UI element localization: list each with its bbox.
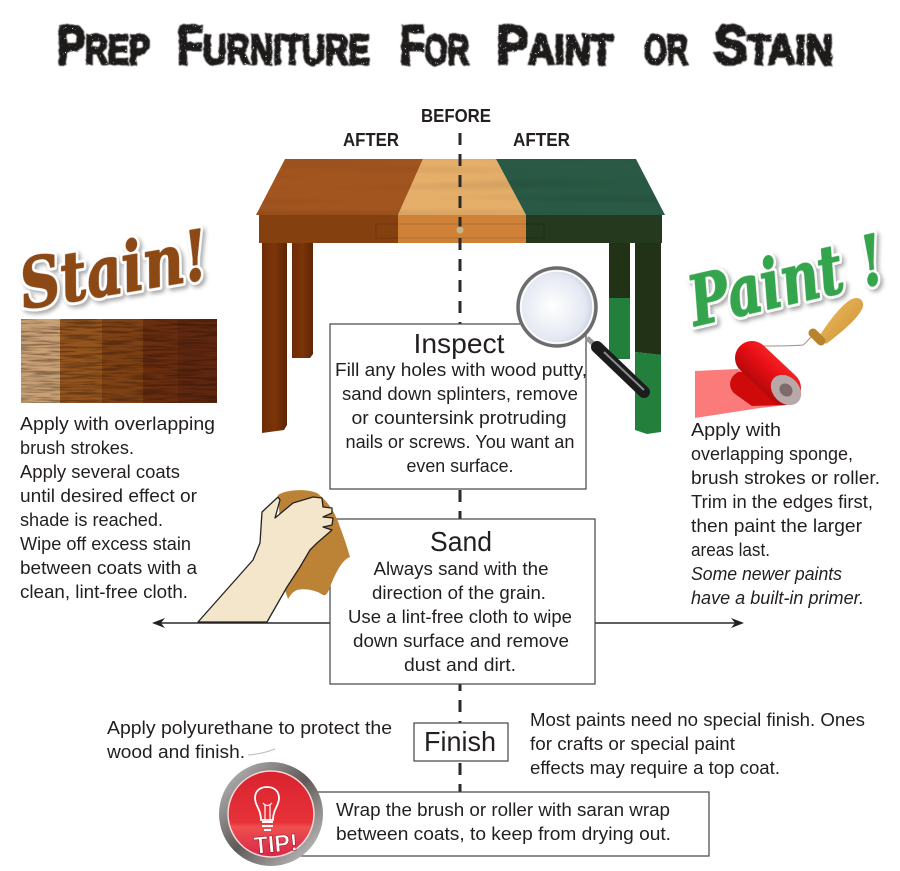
stain instructions: shade is reached. (20, 509, 163, 530)
bare apron (398, 215, 526, 243)
painted tabletop (496, 159, 665, 215)
stain instructions: Apply several coats (20, 461, 180, 482)
stain instructions (20, 413, 215, 602)
after label right: AFTER (513, 130, 570, 150)
icon: hand with cloth (198, 490, 350, 622)
title: FURNITURE (177, 13, 370, 76)
icon: tip badge: TIP! (253, 829, 299, 860)
title: PAINT (496, 13, 613, 76)
stain heading: Stain! (14, 216, 214, 326)
stain instructions: Wipe off excess stain (20, 533, 191, 554)
paint finish note: for crafts or special paint (530, 733, 735, 754)
stained apron (259, 215, 398, 243)
sand text: dust and dirt. (404, 654, 516, 675)
stain instructions: brush strokes. (20, 437, 134, 458)
title (57, 13, 833, 76)
after label left: AFTER (343, 130, 399, 150)
polyurethane note: wood and finish. (106, 741, 245, 762)
title: FOR (400, 13, 469, 76)
stain instructions: Apply with overlapping (20, 413, 215, 434)
polyurethane note (106, 717, 392, 762)
paint instructions (691, 419, 880, 608)
title: PREP (57, 13, 150, 76)
paint finish note (530, 709, 865, 778)
paint instructions: Apply with (691, 419, 781, 440)
stain instructions: between coats with a (20, 557, 198, 578)
paint instructions: Some newer paints (691, 563, 842, 584)
paint instructions: Trim in the edges first, (691, 491, 873, 512)
inspect text: sand down splinters, remove (342, 383, 578, 404)
inspect text (335, 359, 587, 476)
paint instructions: brush strokes or roller. (691, 467, 880, 488)
painted front right leg (635, 243, 661, 434)
sand heading: Sand (430, 526, 492, 557)
panel: tip (300, 792, 709, 856)
sand text: direction of the grain. (372, 582, 546, 603)
stain instructions: until desired effect or (20, 485, 197, 506)
panel: tip: between coats, to keep from drying out. (336, 823, 671, 844)
panel: tip: Wrap the brush or roller with saran wrap (336, 799, 670, 820)
stain colour swatches (21, 319, 217, 403)
stained tabletop (256, 159, 423, 215)
paint instructions: overlapping sponge, (691, 443, 853, 464)
stain heading: Stain! (14, 216, 214, 326)
icon: paint roller (695, 298, 863, 418)
before label: BEFORE (421, 106, 491, 126)
icon: tip badge (219, 762, 323, 866)
inspect text: Fill any holes with wood putty, (335, 359, 587, 380)
stained front left leg (262, 243, 287, 433)
bare tabletop (398, 159, 526, 215)
icon: magnifying glass (518, 268, 644, 392)
paint instructions: then paint the larger (691, 515, 862, 536)
panel: inspect (330, 324, 587, 489)
stained back left leg (292, 243, 313, 358)
panel: finish: Finish (424, 726, 496, 757)
painted apron (526, 215, 662, 243)
title: OR (644, 26, 688, 73)
sand text (348, 558, 572, 675)
inspect text: even surface. (406, 455, 514, 476)
panel: sand (330, 519, 595, 684)
inspect heading: Inspect (414, 328, 505, 359)
vertical dashed divider (458, 133, 462, 795)
stain instructions: clean, lint-free cloth. (20, 581, 188, 602)
paint instructions: have a built-in primer. (691, 587, 864, 608)
paint finish note: effects may require a top coat. (530, 757, 780, 778)
inspect text: nails or screws. You want an (346, 431, 574, 452)
horizontal arrow (152, 618, 744, 628)
sand text: down surface and remove (353, 630, 569, 651)
inspect text: or countersink protruding (352, 407, 566, 428)
table knob (456, 226, 464, 234)
table illustration (256, 159, 665, 434)
paint finish note: Most paints need no special finish. Ones (530, 709, 865, 730)
sand text: Always sand with the (374, 558, 548, 579)
panel: finish (414, 723, 508, 761)
title: STAIN (714, 13, 833, 76)
paint instructions: areas last. (691, 539, 770, 560)
sand text: Use a lint-free cloth to wipe (348, 606, 572, 627)
painted back right leg (609, 243, 630, 359)
polyurethane note: Apply polyurethane to protect the (107, 717, 392, 738)
